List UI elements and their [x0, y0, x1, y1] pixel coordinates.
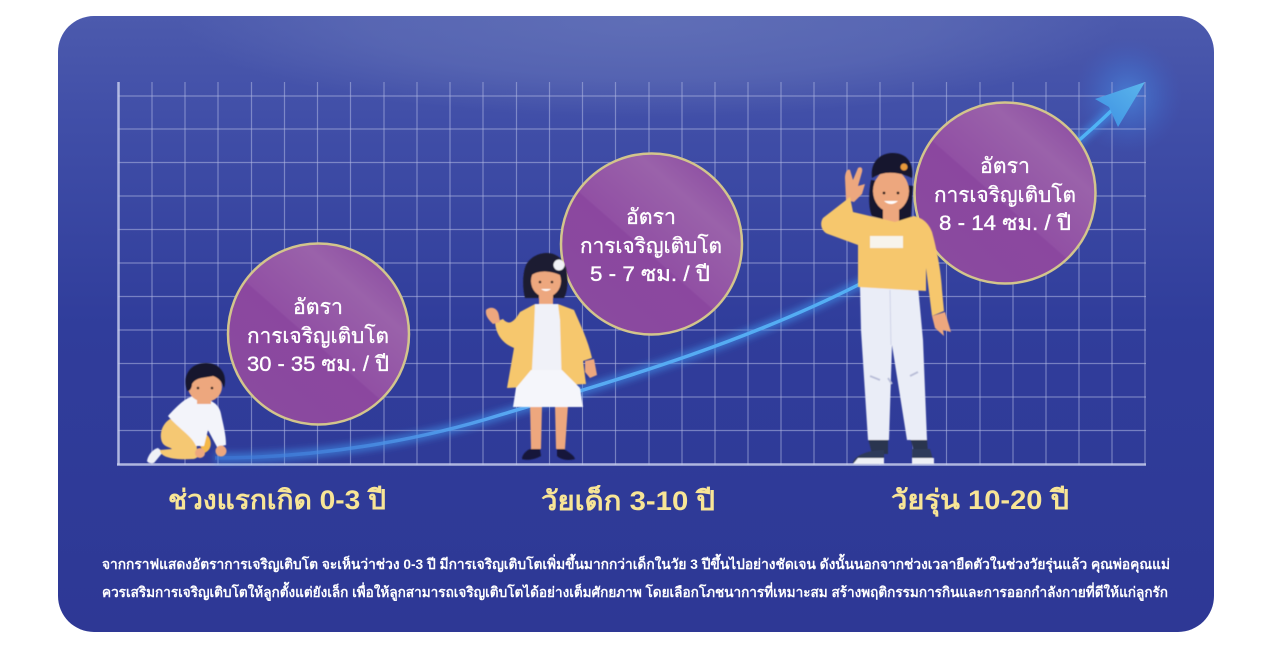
figure: baby crawling [147, 363, 226, 463]
figure: teenage girl [821, 153, 951, 464]
circle: rate 8-14: การเจริญเติบโต [934, 183, 1076, 207]
sub: jacket [495, 304, 592, 388]
circle: rate 30-35: การเจริญเติบโต [247, 324, 389, 348]
circle: rate 8-14 [914, 102, 1096, 284]
circle: rate 5-7: อัตรา [626, 206, 676, 229]
heading: child: วัยเด็ก 3-10 ปี [541, 483, 715, 516]
figure: child girl [486, 253, 597, 460]
circle: rate 5-7: 5 - 7 ซม. / ปี [590, 263, 710, 286]
growth curve arrow [215, 82, 1145, 458]
icon: arrow head [1095, 82, 1145, 127]
text block: description [102, 553, 1170, 601]
chart grid [117, 82, 1146, 465]
circle: rate 5-7: การเจริญเติบโต [580, 234, 722, 258]
circle: rate 30-35: อัตรา [293, 296, 343, 319]
circle: rate 8-14: 8 - 14 ซม. / ปี [939, 212, 1071, 235]
heading: teen: วัยรุ่น 10-20 ปี [891, 485, 1069, 517]
heading: newborn: ช่วงแรกเกิด 0-3 ปี [168, 485, 386, 515]
circle: rate 30-35 [228, 244, 409, 424]
circle: rate 8-14: อัตรา [980, 155, 1030, 178]
sub: sweater [821, 197, 944, 316]
circle: rate 5-7 [561, 154, 742, 334]
text block: description: ควรเสริมการเจริญเติบโตให้ลูกตั้งแต่ยังเล็ก เพื่อให้ลูกสามารถเจริญเติบโตได้อย่างเต็มศักยภาพ โดยเลือกโภชนาการที่เหมาะสม สร้างพฤติกรรมการกินและการออกกำลังกายที่ดีให้แก่ลูกรัก [102, 581, 1168, 601]
circle: rate 30-35: 30 - 35 ซม. / ปี [247, 353, 389, 376]
text block: description: จากกราฟแสดงอัตราการเจริญเติบโต จะเห็นว่าช่วง 0-3 ปี มีการเจริญเติบโตเพิ่มขึ้นมากกว่าเด็กในวัย 3 ปีขึ้นไปอย่างชัดเจน ดังนั้นนอกจากช่วงเวลายืดตัวในช่วงวัยรุ่นแล้ว คุณพ่อคุณแม่ [102, 553, 1170, 573]
